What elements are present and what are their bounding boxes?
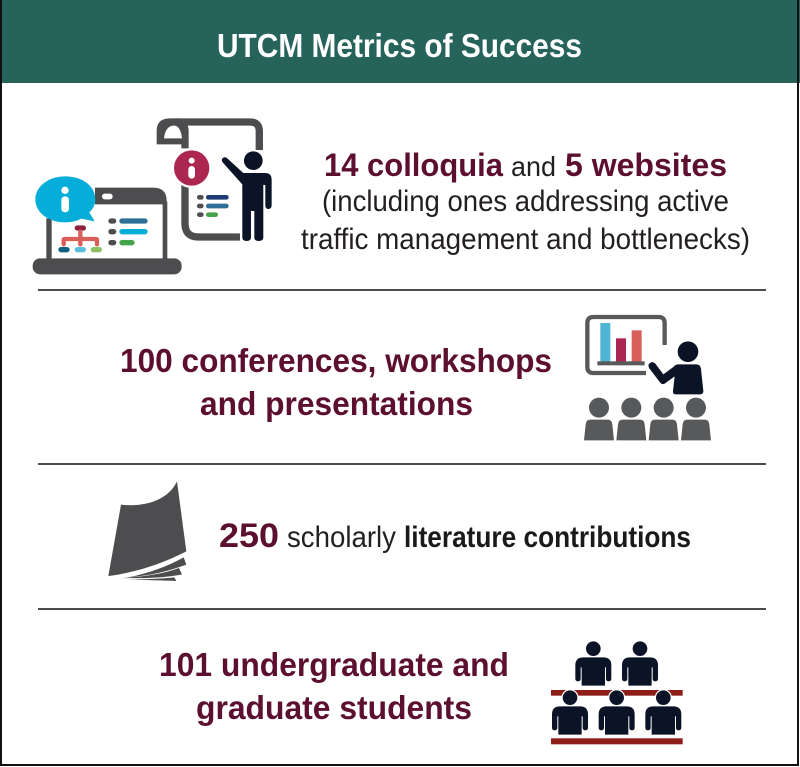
speech bubble	[35, 176, 95, 222]
text: colloquia and websites: traffic management and bottlenecks)	[301, 223, 750, 256]
org chart	[75, 225, 86, 231]
text: colloquia and websites	[301, 147, 750, 256]
info circle red	[172, 148, 212, 188]
scroll document	[174, 122, 259, 237]
header banner	[0, 0, 800, 83]
laptop	[95, 188, 167, 204]
text: literature contributions: literature contributions	[404, 521, 691, 554]
text: literature contributions: 250	[219, 517, 279, 555]
text: colloquia and websites: (including ones addressing active	[322, 185, 729, 218]
text: students	[159, 646, 509, 726]
icon: laptop and document with presenter	[33, 118, 272, 274]
text: colloquia and websites: 14 colloquia	[324, 147, 503, 183]
person	[222, 151, 272, 241]
icon: stacked journal	[108, 481, 186, 581]
text: students: 101 undergraduate and	[159, 646, 509, 683]
text: conferences: and presentations	[200, 385, 473, 422]
title: UTCM Metrics of Success	[217, 27, 582, 64]
text: conferences: 100 conferences, workshops	[120, 342, 552, 379]
text: colloquia and websites: and	[511, 151, 556, 182]
text: conferences	[120, 342, 552, 422]
icon: presentation to audience	[584, 317, 711, 440]
text: students: graduate students	[196, 689, 472, 726]
text: literature contributions	[219, 517, 691, 555]
laptop list	[108, 218, 116, 224]
document lines	[197, 195, 204, 200]
text: literature contributions: scholarly	[287, 521, 396, 554]
icon: students in rows	[551, 641, 683, 744]
text: colloquia and websites: 5 websites	[565, 147, 727, 183]
